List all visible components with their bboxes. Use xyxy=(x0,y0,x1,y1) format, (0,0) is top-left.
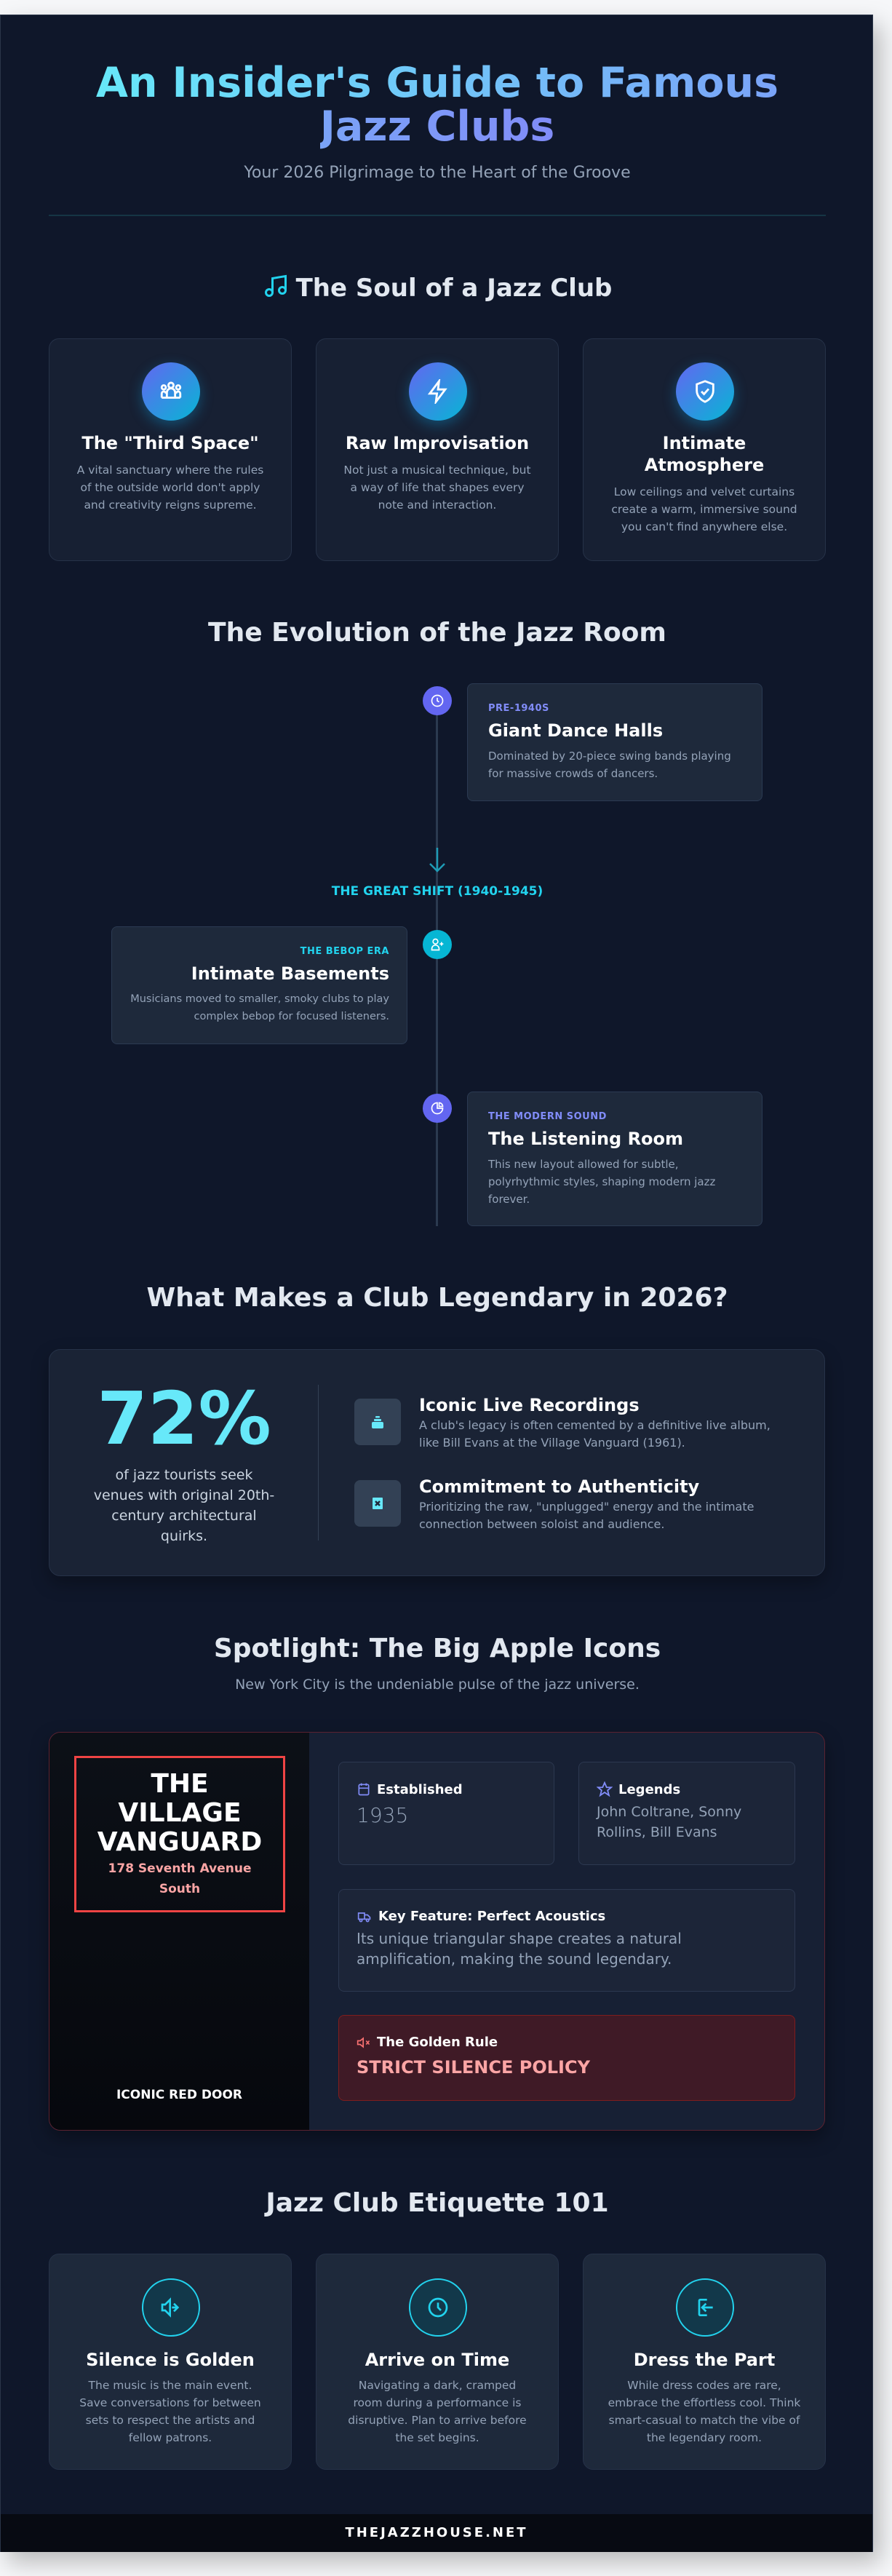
heading: legendary: What Makes a Club Legendary in 2026? xyxy=(147,1283,728,1313)
card: intimate basements: Musicians moved to smaller, smoky clubs to play complex bebop for focused listeners. xyxy=(130,993,389,1022)
card: improvisation: Raw Improvisation xyxy=(346,433,529,453)
footer xyxy=(1,2514,872,2552)
stat: 72% xyxy=(94,1376,274,1544)
card: silence xyxy=(49,2254,292,2470)
title xyxy=(96,59,778,151)
card: acoustics: Its unique triangular shape creates a natural amplification, making the sound legendary. xyxy=(357,1930,682,1968)
item: authenticity: Commitment to Authenticity xyxy=(419,1476,699,1497)
card: silence: Silence is Golden xyxy=(86,2350,255,2370)
icon: authenticity xyxy=(354,1480,401,1527)
card: established: Established xyxy=(377,1781,463,1797)
icon: recording xyxy=(354,1399,401,1445)
card: giant dance halls: Giant Dance Halls xyxy=(488,720,663,741)
heading: spotlight: Spotlight: The Big Apple Icons xyxy=(214,1634,661,1663)
card: giant dance halls xyxy=(467,683,762,801)
card: third space xyxy=(49,338,292,561)
subtitle: spotlight: New York City is the undeniable pulse of the jazz universe. xyxy=(235,1677,640,1693)
stat: 72%: of jazz tourists seek venues with original 20th-century architectural quirks. xyxy=(94,1467,274,1544)
card: silence: The music is the main event. Save conversations for between sets to respect the artists and fellow patrons. xyxy=(79,2379,261,2444)
card: listening room: THE MODERN SOUND xyxy=(488,1111,607,1122)
arrow xyxy=(429,848,445,872)
card: improvisation xyxy=(316,338,559,561)
card: improvisation: Not just a musical technique, but a way of life that shapes every note and interaction. xyxy=(343,464,531,512)
card: legends xyxy=(578,1762,795,1865)
card: atmosphere xyxy=(583,338,826,561)
node 2 xyxy=(423,930,452,959)
callout: golden rule: The Golden Rule xyxy=(377,2035,498,2050)
card: listening room xyxy=(467,1092,762,1226)
card: listening room: The Listening Room xyxy=(488,1129,683,1149)
card: dress xyxy=(583,2254,826,2470)
heading: etiquette: Jazz Club Etiquette 101 xyxy=(266,2188,609,2218)
sign: THE xyxy=(151,1769,209,1799)
item: authenticity xyxy=(354,1476,754,1531)
card: atmosphere: Atmosphere xyxy=(645,455,764,475)
icon: door xyxy=(676,2278,734,2337)
sign xyxy=(74,1756,285,1912)
item: authenticity: Prioritizing the raw, "unplugged" energy and the intimate connection between soloist and audience. xyxy=(419,1500,754,1531)
icon: shield xyxy=(676,362,734,421)
panel: soul cards xyxy=(49,338,826,561)
great shift label: THE GREAT SHIFT (1940-1945) xyxy=(332,884,543,899)
icon: people xyxy=(142,362,200,421)
callout: golden rule: STRICT SILENCE POLICY xyxy=(357,2057,590,2078)
icon: mute xyxy=(142,2278,200,2337)
node 1 xyxy=(423,686,452,715)
icon: clock xyxy=(409,2278,467,2337)
item: live recordings: Iconic Live Recordings xyxy=(419,1395,640,1415)
heading: evolution: The Evolution of the Jazz Room xyxy=(208,618,666,648)
panel: etiquette xyxy=(49,2254,826,2470)
card: arrive xyxy=(316,2254,559,2470)
card: established: 1935 xyxy=(357,1803,408,1827)
node 3 xyxy=(423,1094,452,1123)
card: established xyxy=(338,1762,554,1865)
card: intimate basements: Intimate Basements xyxy=(191,963,389,984)
card: third space: A vital sanctuary where the rules of the outside world don't apply and creativity reigns supreme. xyxy=(77,464,263,512)
sign: 178 Seventh Avenue South xyxy=(108,1861,251,1896)
sign: VILLAGE xyxy=(118,1798,242,1828)
icon: bolt xyxy=(409,362,467,421)
timeline xyxy=(111,683,762,1226)
card: dress: While dress codes are rare, embrace the effortless cool. Think smart-casual to match the vibe of the legendary room. xyxy=(608,2379,800,2444)
title: An Insider's Guide to Famous xyxy=(96,59,778,107)
card: arrive: Arrive on Time xyxy=(365,2350,509,2370)
card: listening room: This new layout allowed for subtle, polyrhythmic styles, shaping modern jazz forever. xyxy=(488,1158,715,1206)
card: dress: Dress the Part xyxy=(634,2350,775,2370)
card: giant dance halls: PRE-1940S xyxy=(488,703,549,714)
stat: 72%: 72% xyxy=(97,1376,271,1461)
heading: soul: The Soul of a Jazz Club xyxy=(296,274,612,303)
card: acoustics xyxy=(338,1889,795,1992)
card: arrive: Navigating a dark, cramped room during a performance is disruptive. Plan to arrive before the set begins. xyxy=(348,2379,527,2444)
card: legends: Legends xyxy=(618,1781,680,1797)
card: acoustics: Key Feature: Perfect Acoustics xyxy=(378,1909,605,1924)
sign: VANGUARD xyxy=(97,1827,262,1857)
card: third space: The "Third Space" xyxy=(81,433,259,453)
card: atmosphere: Low ceilings and velvet curtains create a warm, immersive sound you can't find anywhere else. xyxy=(611,485,797,533)
card: intimate basements xyxy=(111,926,407,1044)
panel: stats xyxy=(49,1349,825,1576)
card: giant dance halls: Dominated by 20-piece swing bands playing for massive crowds of dancers. xyxy=(488,750,731,780)
item: live recordings: A club's legacy is often cemented by a definitive live album, like Bill Evans at the Village Vanguard (1961). xyxy=(419,1418,770,1450)
footer: THEJAZZHOUSE.NET xyxy=(345,2525,528,2540)
left: red door xyxy=(49,1733,309,2131)
panel: village vanguard xyxy=(49,1732,825,2131)
card: atmosphere: Intimate xyxy=(663,433,746,453)
item: live recordings xyxy=(354,1395,770,1450)
card: intimate basements: THE BEBOP ERA xyxy=(300,946,389,957)
caption: ICONIC RED DOOR xyxy=(116,2088,242,2102)
callout: golden rule xyxy=(338,2015,795,2101)
subtitle: Your 2026 Pilgrimage to the Heart of the Groove xyxy=(244,164,631,182)
title: Jazz Clubs xyxy=(320,103,554,151)
card: legends: John Coltrane, Sonny Rollins, Bill Evans xyxy=(597,1804,741,1840)
